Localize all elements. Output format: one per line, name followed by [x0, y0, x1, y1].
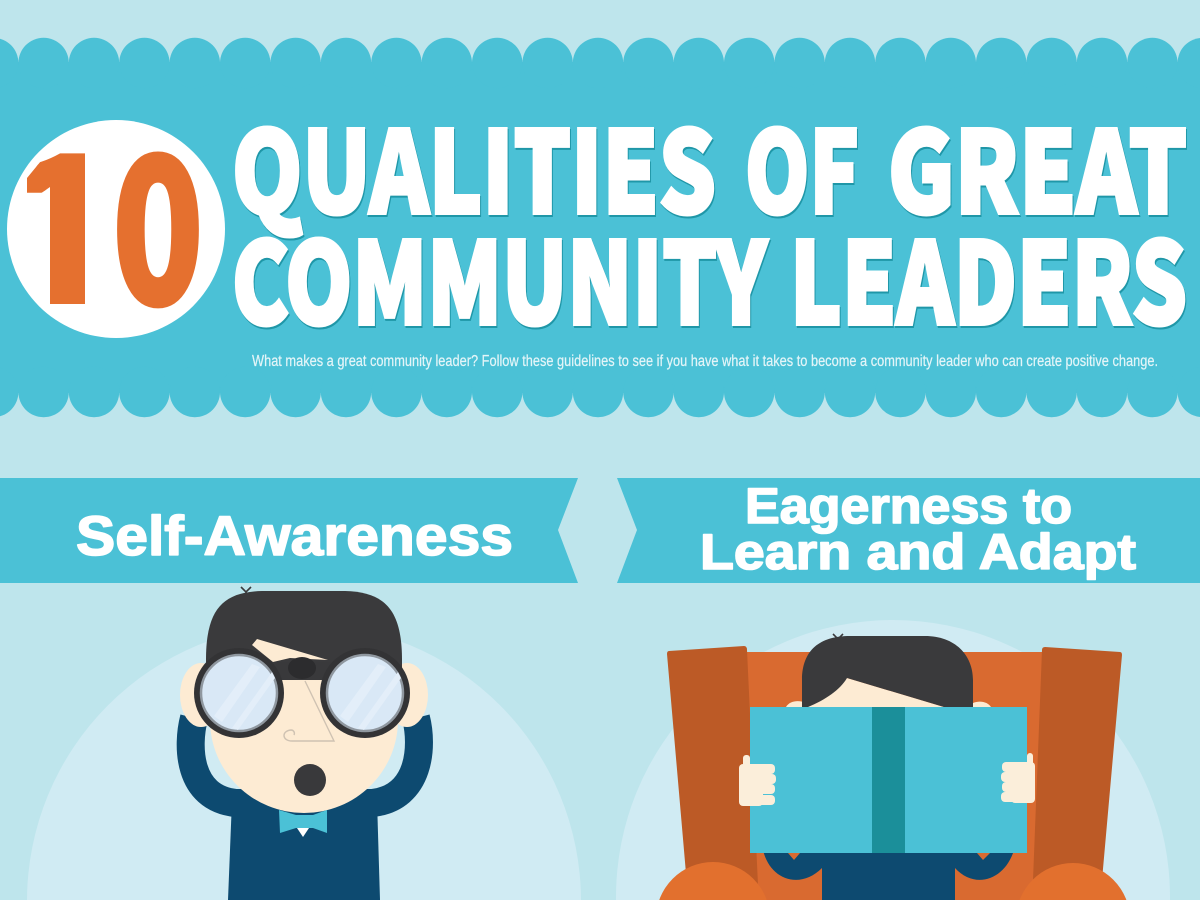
- title: [232, 82, 1187, 357]
- hair sprout: [241, 587, 251, 596]
- hair sprout: [833, 634, 843, 643]
- bow tie: [279, 810, 327, 837]
- armrest: right: [1016, 863, 1130, 900]
- badge: number 10: 1: [0, 66, 134, 362]
- title: QUALITIES: [232, 82, 716, 246]
- chair back: [747, 652, 1043, 900]
- character: person reading in armchair: [656, 634, 1130, 900]
- title: COMMUNITY: [232, 193, 768, 357]
- hand: right: [1001, 753, 1035, 803]
- armrest: left: [656, 862, 770, 900]
- chair wing: right: [1033, 647, 1122, 880]
- arms: [191, 718, 419, 803]
- ears: [180, 663, 428, 727]
- nose: [284, 681, 334, 741]
- banner: Eagerness to Learn and Adapt: Eagerness to: [745, 478, 1072, 534]
- face: [808, 678, 944, 707]
- panel background circle: right: [616, 620, 1170, 900]
- ears: [786, 701, 991, 707]
- binoculars: [194, 648, 410, 738]
- book: [750, 707, 1027, 853]
- face: [210, 627, 398, 813]
- arms: [763, 850, 1014, 880]
- header band with scalloped edges: [0, 38, 1200, 417]
- banner: Eagerness to Learn and Adapt: Learn and Adapt: [700, 524, 1136, 580]
- badge: number 10: [7, 120, 225, 338]
- forehead skin: [252, 639, 328, 662]
- body: [822, 850, 955, 900]
- hair: [802, 636, 973, 707]
- elbow gaps: [788, 853, 990, 860]
- badge: number 10: 0: [112, 68, 204, 363]
- panel background circle: left: [27, 624, 581, 900]
- banner: Eagerness to Learn and Adapt: [617, 478, 1200, 583]
- chair wing: left: [667, 646, 758, 885]
- hand: left: [739, 755, 776, 806]
- mouth: [294, 764, 326, 796]
- hair: [206, 591, 402, 675]
- title: OF: [745, 82, 859, 246]
- banner: Self-Awareness: Self-Awareness: [76, 504, 513, 567]
- banner: Self-Awareness: [0, 478, 578, 583]
- character: man with binoculars: [180, 587, 428, 900]
- body: [228, 800, 380, 900]
